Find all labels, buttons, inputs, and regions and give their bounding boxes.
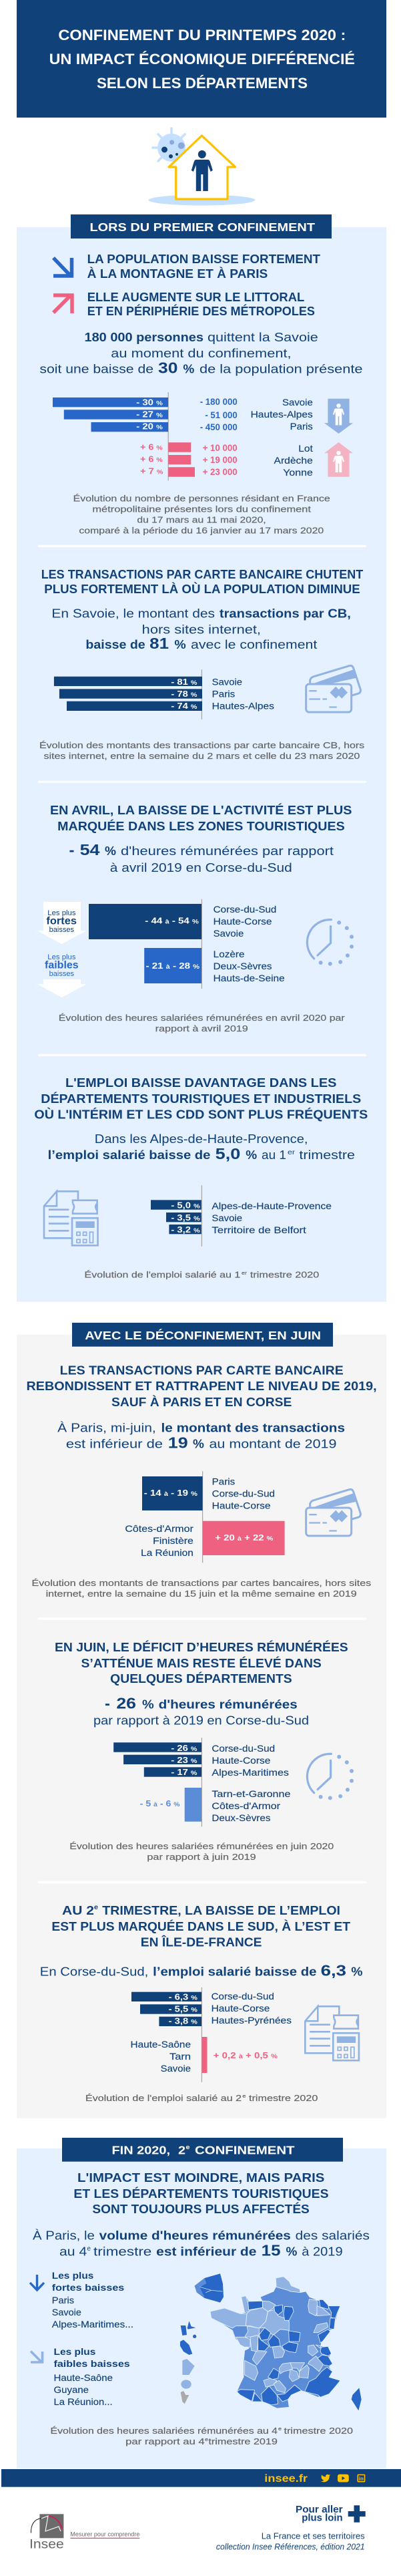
bar chart: transactions juin: Haute-Corse [212, 1500, 271, 1511]
section heading: avec le déconfinement [72, 1323, 333, 1347]
list: les plus faibles baisses: Haute-Saône [53, 2372, 113, 2383]
bar chart: population: + 6 % [140, 454, 163, 464]
text: en Savoie transactions [51, 607, 351, 652]
caption: métropolitaine présentes lors du confinement [92, 505, 312, 514]
list: les plus fortes baisses: Paris [52, 2295, 74, 2305]
heading: la population baisse: LA POPULATION BAISSE FORTEMENT [87, 252, 321, 266]
bar chart: emploi T2: Haute-Corse [212, 2003, 270, 2014]
icon: arrow down right [31, 2352, 43, 2362]
text: 180 000 personnes: quittent la Savoie [208, 331, 318, 344]
heading: emploi [34, 1076, 368, 1121]
source [216, 2531, 365, 2552]
panel: premier confinement [17, 214, 386, 1302]
section heading: fin 2020: 2 [178, 2143, 185, 2156]
footer bar: insee.fr [264, 2473, 308, 2484]
bar chart: emploi T2: - 6,3 % [169, 1991, 198, 2001]
bar chart: transactions: Hautes-Alpes [212, 701, 274, 711]
text: en Savoie transactions: transactions par CB, [220, 607, 351, 620]
caption: Évolution des montants des transactions par carte bancaire CB, hors [39, 740, 364, 750]
bar chart: population: - 20 % [136, 422, 163, 432]
text: à Paris mi-juin: % [193, 1437, 204, 1450]
text: Corse-du-Sud emploi: En Corse-du-Sud, [40, 1965, 148, 1978]
caption: e [242, 2093, 246, 2099]
caption: trimestre 2020 [250, 1271, 319, 1280]
arrow: les plus fortes baisses: Les plus [47, 909, 76, 917]
text: 180 000 personnes: au moment du confinement, [111, 347, 292, 360]
icon: arrow down [30, 2275, 44, 2290]
text: à Paris volume d'heures: des salariés [296, 2229, 370, 2242]
pour aller plus loin: Pour aller [296, 2504, 343, 2515]
bar chart: population: - 27 % [136, 410, 163, 420]
logo: Insee: Insee [29, 2537, 64, 2551]
caption: comparé à la période du 16 janvier au 17 mars 2020 [79, 526, 324, 536]
heading: la population baisse: À LA MONTAGNE ET À PARIS [87, 267, 268, 281]
caption: trimestre 2020 [249, 2094, 318, 2103]
text: à Paris volume d'heures: % [286, 2245, 297, 2258]
caption: par rapport au 4 [125, 2437, 205, 2446]
section heading: fin 2020: CONFINEMENT [195, 2143, 295, 2156]
section heading: avec le déconfinement: AVEC LE DÉCONFINEMENT, EN JUIN [85, 1328, 321, 1342]
heading: 2e trimestre [51, 1903, 351, 1949]
bar chart: population: Savoie [282, 397, 313, 408]
bar chart: emploi T2: Tarn [169, 2051, 191, 2062]
heading: 2e trimestre: AU 2 [62, 1903, 94, 1917]
text: à Paris volume d'heures: est inférieur de [156, 2245, 256, 2258]
bar chart: heures juin: Deux-Sèvres [212, 1812, 271, 1823]
bar chart: transactions juin: - 14 à - 19 % [144, 1488, 198, 1498]
icon: bank card [306, 1489, 360, 1536]
bar chart: emploi T1: - 3,5 % [171, 1213, 200, 1223]
text: Alpes-de-Haute-Provence: l’emploi salarié baisse de [48, 1148, 210, 1162]
pour aller plus loin [296, 2504, 366, 2523]
list: les plus faibles baisses [53, 2346, 130, 2407]
bar chart: transactions juin: Finistère [153, 1535, 193, 1546]
bar chart: transactions: - 74 % [171, 701, 197, 711]
bar chart: population: + 6 % [140, 442, 163, 452]
icon: documents and calculator [44, 1191, 98, 1245]
bar chart: emploi T1: Alpes-de-Haute-Provence [212, 1200, 332, 1211]
text: Corse-du-Sud emploi: % [351, 1965, 363, 1978]
heading: emploi: DÉPARTEMENTS TOURISTIQUES ET INDUSTRIELS [41, 1092, 361, 1106]
bar chart: emploi T2: Hautes-Pyrénées [212, 2015, 292, 2026]
caption [51, 2426, 353, 2446]
bar chart: emploi T1: - 5,0 % [171, 1200, 200, 1210]
heading: transactions: LES TRANSACTIONS PAR CARTE BANCAIRE CHUTENT [41, 567, 364, 581]
text: moins 26 %: % [142, 1698, 154, 1712]
inset: Île-de-France [195, 2273, 224, 2303]
bar chart: population: Yonne [283, 467, 313, 478]
caption: trimestre 2020 [284, 2426, 353, 2436]
list: les plus faibles baisses: faibles baisses [53, 2358, 130, 2369]
map: France départements [180, 2273, 362, 2410]
text: en Savoie transactions: En Savoie, le montant des [51, 607, 215, 620]
bar chart: heures juin: Alpes-Maritimes [212, 1767, 289, 1778]
bar chart: heures juin [113, 1738, 291, 1826]
bar chart: transactions juin: Corse-du-Sud [212, 1488, 275, 1499]
bar chart: emploi T2: - 5,5 % [169, 2003, 198, 2014]
pour aller plus loin: plus loin [302, 2512, 343, 2523]
bar chart: transactions juin: + 20 à + 22 % [215, 1533, 274, 1543]
caption: Évolution des heures salariées rémunérées au 4 [51, 2426, 278, 2436]
text: moins 54 %: 54 [80, 841, 100, 858]
heading: emploi: OÙ L'INTÉRIM ET LES CDD SONT PLUS FRÉQUENTS [34, 1107, 368, 1121]
bar chart: population: + 10 000 [203, 443, 238, 453]
bar chart: heures avril: Haute-Corse [214, 916, 272, 927]
text: à Paris volume d'heures: trimestre [93, 2245, 151, 2258]
text: en Savoie transactions: hors sites internet, [142, 623, 261, 636]
bar chart: population: - 450 000 [200, 422, 238, 432]
text: Alpes-de-Haute-Provence: 5,0 [216, 1145, 240, 1162]
bar chart: heures juin: - 17 % [171, 1767, 197, 1777]
arrow: les plus fortes baisses [37, 902, 87, 944]
text: Alpes-de-Haute-Provence: % [246, 1148, 257, 1162]
bar chart: heures juin: Haute-Corse [212, 1755, 271, 1766]
bar chart: heures juin: Tarn-et-Garonne [212, 1788, 291, 1799]
title banner: UN IMPACT ÉCONOMIQUE DIFFÉRENCIÉ [49, 51, 355, 67]
icon: twitter [321, 2474, 330, 2482]
text: moins 54 %: % [105, 844, 116, 858]
text: à Paris mi-juin [57, 1421, 345, 1451]
heading: 2e trimestre: TRIMESTRE, LA BAISSE DE L’EMPLOI [102, 1903, 340, 1917]
caption: Évolution des heures salariées rémunérées en avril 2020 par [59, 1013, 345, 1023]
text: Alpes-de-Haute-Provence [48, 1132, 355, 1162]
heading: en juin: QUELQUES DÉPARTEMENTS [110, 1671, 292, 1685]
icon: linkedin: in [359, 2476, 364, 2482]
heading: transactions rebondissent: REBONDISSENT ET RATTRAPENT LE NIVEAU DE 2019, [27, 1379, 377, 1393]
text: moins 26 % [93, 1695, 309, 1728]
heading: en avril [50, 803, 352, 833]
text: Alpes-de-Haute-Provence: trimestre [299, 1148, 355, 1162]
caption [39, 740, 364, 761]
text: en Savoie transactions: 81 [149, 635, 169, 652]
text: 180 000 personnes: soit une baisse de [39, 362, 153, 375]
heading: 2e trimestre: EST PLUS MARQUÉE DANS LE SUD, À L’EST ET [51, 1919, 351, 1933]
bar chart: transactions juin [125, 1471, 285, 1563]
heading: impact moindre: SONT TOUJOURS PLUS AFFECTÉS [92, 2202, 310, 2216]
heading: impact moindre [73, 2170, 329, 2216]
bar chart: transactions juin: Paris [212, 1476, 235, 1487]
bar chart: heures avril: Hauts-de-Seine [214, 973, 285, 983]
list: les plus fortes baisses: Savoie [52, 2307, 81, 2317]
heading: en juin [55, 1640, 348, 1685]
arrow: les plus faibles baisses: Les plus [47, 953, 76, 961]
caption: Évolution du nombre de personnes résidant en France [73, 494, 330, 504]
text: Corse-du-Sud emploi: l’emploi salarié baisse de [153, 1965, 316, 1978]
text: à Paris mi-juin: À Paris, mi-juin, [57, 1421, 156, 1434]
bar chart: heures avril [89, 899, 285, 989]
text: en Savoie transactions: baisse de [85, 638, 145, 651]
list: les plus faibles baisses: Guyane [53, 2384, 89, 2395]
caption [73, 494, 330, 536]
heading: transactions rebondissent: LES TRANSACTIONS PAR CARTE BANCAIRE [60, 1363, 344, 1378]
arrow: les plus faibles baisses: baisses [49, 970, 75, 978]
bar chart: transactions juin: Côtes-d'Armor [125, 1523, 193, 1534]
section heading: fin 2020 [62, 2138, 343, 2162]
source: collection Insee Références, édition 2021 [216, 2542, 365, 2552]
list: les plus faibles baisses: La Réunion... [53, 2396, 113, 2407]
icon: documents and calculator [305, 2006, 359, 2060]
list: les plus fortes baisses: Les plus [52, 2270, 94, 2281]
bar chart: population [53, 392, 313, 480]
caption: e [278, 2426, 282, 2432]
list: les plus fortes baisses [52, 2270, 133, 2329]
heading: elle augmente: ELLE AUGMENTE SUR LE LITTORAL [87, 290, 304, 304]
title banner: SELON LES DÉPARTEMENTS [97, 75, 308, 92]
title banner: CONFINEMENT DU PRINTEMPS 2020 : [58, 27, 346, 43]
bar chart: heures juin: Corse-du-Sud [212, 1743, 275, 1754]
bar chart: population: Lot [298, 443, 313, 454]
heading: transactions rebondissent: SAUF À PARIS ET EN CORSE [111, 1395, 292, 1409]
bar chart: heures avril: - 21 à - 28 % [145, 961, 200, 971]
icon: arrow down [53, 258, 72, 276]
bar chart: population: + 7 % [140, 466, 163, 476]
caption [85, 2093, 318, 2103]
heading: emploi: L'EMPLOI BAISSE DAVANTAGE DANS LES [65, 1076, 336, 1090]
bar chart: population: - 30 % [136, 397, 163, 408]
heading: 2e trimestre: e [94, 1904, 98, 1911]
bar chart: heures juin: - 23 % [171, 1755, 197, 1765]
bar chart: transactions: - 78 % [171, 689, 197, 699]
heading: elle augmente [87, 290, 315, 318]
heading: en juin: S’ATTÉNUE MAIS RESTE ÉLEVÉ DANS [81, 1656, 322, 1670]
heading: transactions: PLUS FORTEMENT LÀ OÙ LA POPULATION DIMINUE [44, 582, 360, 596]
caption: trimestre 2019 [208, 2437, 278, 2446]
caption: du 17 mars au 11 mai 2020, [137, 516, 266, 525]
text: 180 000 personnes: de la population présente [199, 362, 363, 375]
text: à Paris mi-juin: le montant des transactions [161, 1421, 345, 1434]
section heading: lors du premier confinement [71, 214, 332, 238]
heading: transactions [41, 567, 364, 596]
bar chart: population: Paris [290, 421, 313, 432]
mainland base [210, 2277, 340, 2408]
caption: sites internet, entre la semaine du 2 mars et celle du 23 mars 2020 [44, 752, 360, 761]
bar chart: transactions juin: La Réunion [141, 1547, 193, 1558]
icon: linkedin [358, 2474, 365, 2482]
heading: impact moindre: L'IMPACT EST MOINDRE, MAIS PARIS [77, 2170, 324, 2185]
text: à Paris mi-juin: est inférieur de [66, 1437, 163, 1450]
title banner [17, 0, 386, 118]
icon: clock [307, 920, 354, 966]
bar chart: heures juin: - 26 % [171, 1743, 197, 1753]
bar chart: transactions [54, 669, 274, 719]
bar chart: heures juin: - 5 à - 6 % [140, 1798, 180, 1808]
section heading: fin 2020: e [185, 2144, 189, 2151]
icon: population down arrow [324, 399, 353, 434]
caption [32, 1578, 371, 1599]
list: les plus faibles baisses: Les plus [53, 2346, 96, 2357]
text: moins 26 %: - [105, 1695, 110, 1712]
bar chart: transactions: Paris [212, 689, 235, 699]
caption: Évolution des heures salariées rémunérées en juin 2020 [69, 1841, 334, 1851]
text: à Paris volume d'heures: À Paris, le [33, 2229, 95, 2242]
text: moins 54 %: à avril 2019 en Corse-du-Sud [110, 861, 292, 874]
text: en Savoie transactions: avec le confinement [191, 638, 317, 651]
icon: clock [307, 1754, 354, 1800]
arrow: les plus fortes baisses: fortes [46, 916, 77, 927]
text: moins 26 %: par rapport à 2019 en Corse-du-Sud [93, 1714, 309, 1728]
caption: er [242, 1270, 248, 1276]
text: moins 26 %: d'heures rémunérées [159, 1698, 298, 1712]
heading: elle augmente: ET EN PÉRIPHÉRIE DES MÉTROPOLES [87, 304, 315, 318]
bar chart: population: - 51 000 [205, 410, 238, 420]
arrow: les plus fortes baisses: baisses [49, 926, 75, 934]
bar chart: population: + 23 000 [203, 467, 238, 477]
arrow: les plus faibles baisses: faibles [45, 960, 79, 971]
logo: Insee [29, 2514, 139, 2551]
icon: virus and person in house [148, 128, 255, 206]
footer bar [1, 2469, 401, 2487]
bar chart: transactions: - 81 % [171, 677, 197, 687]
text: moins 54 %: - [69, 841, 75, 858]
text: 180 000 personnes [39, 331, 363, 376]
caption [69, 1841, 334, 1862]
icon: plus [348, 2505, 366, 2523]
heading: en avril: MARQUÉE DANS LES ZONES TOURISTIQUES [57, 819, 345, 833]
text: à Paris volume d'heures: 15 [262, 2241, 281, 2259]
caption: par rapport à juin 2019 [147, 1853, 256, 1862]
overseas territories and Corsica [180, 2321, 362, 2410]
text: à Paris mi-juin: au montant de 2019 [210, 1437, 336, 1450]
icon: bank card [306, 665, 360, 712]
caption: internet, entre la semaine du 15 juin et la même semaine en 2019 [46, 1589, 357, 1599]
section heading: fin 2020: FIN 2020, [112, 2143, 170, 2156]
caption [59, 1013, 345, 1033]
heading: impact moindre: ET LES DÉPARTEMENTS TOURISTIQUES [73, 2187, 329, 2201]
bar chart: heures avril: Corse-du-Sud [214, 904, 276, 915]
text: moins 54 %: d'heures rémunérées par rapport [121, 844, 334, 858]
icon: population up arrow [324, 442, 353, 477]
text: en Savoie transactions: % [174, 638, 186, 651]
bar chart: population: Hautes-Alpes [251, 409, 313, 420]
bar chart: emploi T2: - 3,8 % [169, 2016, 198, 2026]
icon: youtube [338, 2474, 349, 2482]
heading: transactions rebondissent [27, 1363, 377, 1409]
bar chart: heures avril: Deux-Sèvres [214, 961, 272, 971]
bar chart: heures avril: - 44 à - 54 % [145, 916, 199, 926]
list: les plus fortes baisses: Alpes-Maritimes... [52, 2319, 133, 2329]
panel: fin 2020 [17, 2138, 386, 2468]
bar chart: population: + 19 000 [203, 455, 238, 465]
text: à Paris volume d'heures: e [87, 2245, 91, 2253]
bar chart: emploi T2: Corse-du-Sud [212, 1991, 274, 2001]
bar chart: emploi T2 [131, 1987, 292, 2082]
caption: Évolution des montants de transactions par cartes bancaires, hors sites [32, 1578, 371, 1588]
text: à Paris volume d'heures: volume d'heures rémunérées [99, 2229, 291, 2242]
section heading: lors du premier confinement: LORS DU PREMIER CONFINEMENT [89, 220, 315, 234]
heading: la population baisse [87, 252, 321, 281]
text: Alpes-de-Haute-Provence: er [288, 1149, 296, 1156]
text: à Paris mi-juin: 19 [168, 1434, 188, 1451]
text: Corse-du-Sud emploi [40, 1961, 363, 1979]
bar chart: emploi T2: + 0,2 à + 0,5 % [214, 2050, 278, 2060]
heading: en juin: EN JUIN, LE DÉFICIT D’HEURES RÉMUNÉRÉES [55, 1640, 348, 1654]
bar chart: emploi T2: Haute-Saône [131, 2039, 191, 2050]
text: moins 26 %: 26 [116, 1695, 136, 1712]
arrow: les plus faibles baisses [37, 953, 87, 997]
caption: rapport à avril 2019 [155, 1024, 248, 1033]
bar chart: emploi T1: Savoie [212, 1213, 242, 1223]
text: 180 000 personnes: 30 [158, 359, 177, 376]
caption [84, 1270, 319, 1280]
bar chart: emploi T1: - 3,2 % [171, 1225, 200, 1235]
text: Alpes-de-Haute-Provence: Dans les Alpes-de-Haute-Provence, [95, 1132, 308, 1146]
list: les plus fortes baisses: fortes baisses [52, 2282, 125, 2293]
caption: Évolution de l'emploi salarié au 1 [84, 1270, 240, 1280]
bar chart: population: Ardèche [274, 455, 313, 466]
logo: Insee: Mesurer pour comprendre [70, 2531, 139, 2539]
bar chart: emploi T1 [151, 1185, 332, 1247]
heading: en avril: EN AVRIL, LA BAISSE DE L'ACTIVITÉ EST PLUS [50, 803, 352, 817]
bar chart: heures avril: Savoie [214, 928, 244, 939]
bar chart: heures avril: Lozère [214, 949, 245, 959]
caption: Évolution de l'emploi salarié au 2 [85, 2093, 242, 2103]
text: à Paris volume d'heures: au 4 [59, 2245, 87, 2258]
text: Alpes-de-Haute-Provence: au 1 [262, 1148, 286, 1162]
bar chart: emploi T2: Savoie [161, 2063, 191, 2074]
panel: déconfinement [17, 1323, 386, 2118]
bar chart: transactions: Savoie [212, 677, 242, 687]
bar chart: emploi T1: Territoire de Belfort [212, 1225, 306, 1235]
bar chart: population: - 180 000 [200, 397, 238, 407]
icon: arrow up [53, 295, 72, 313]
bar chart: heures juin: Côtes-d'Armor [212, 1800, 280, 1811]
text: à Paris volume d'heures: à 2019 [302, 2245, 343, 2258]
caption: e [205, 2436, 208, 2442]
text: 180 000 personnes: % [183, 362, 194, 375]
source: La France et ses territoires [262, 2531, 365, 2541]
text: Corse-du-Sud emploi: 6,3 [321, 1961, 346, 1979]
text: 180 000 personnes: 180 000 personnes [84, 331, 204, 344]
text: à Paris volume d'heures [33, 2229, 370, 2259]
text: moins 54 % [69, 841, 334, 874]
heading: 2e trimestre: EN ÎLE-DE-FRANCE [141, 1935, 262, 1949]
